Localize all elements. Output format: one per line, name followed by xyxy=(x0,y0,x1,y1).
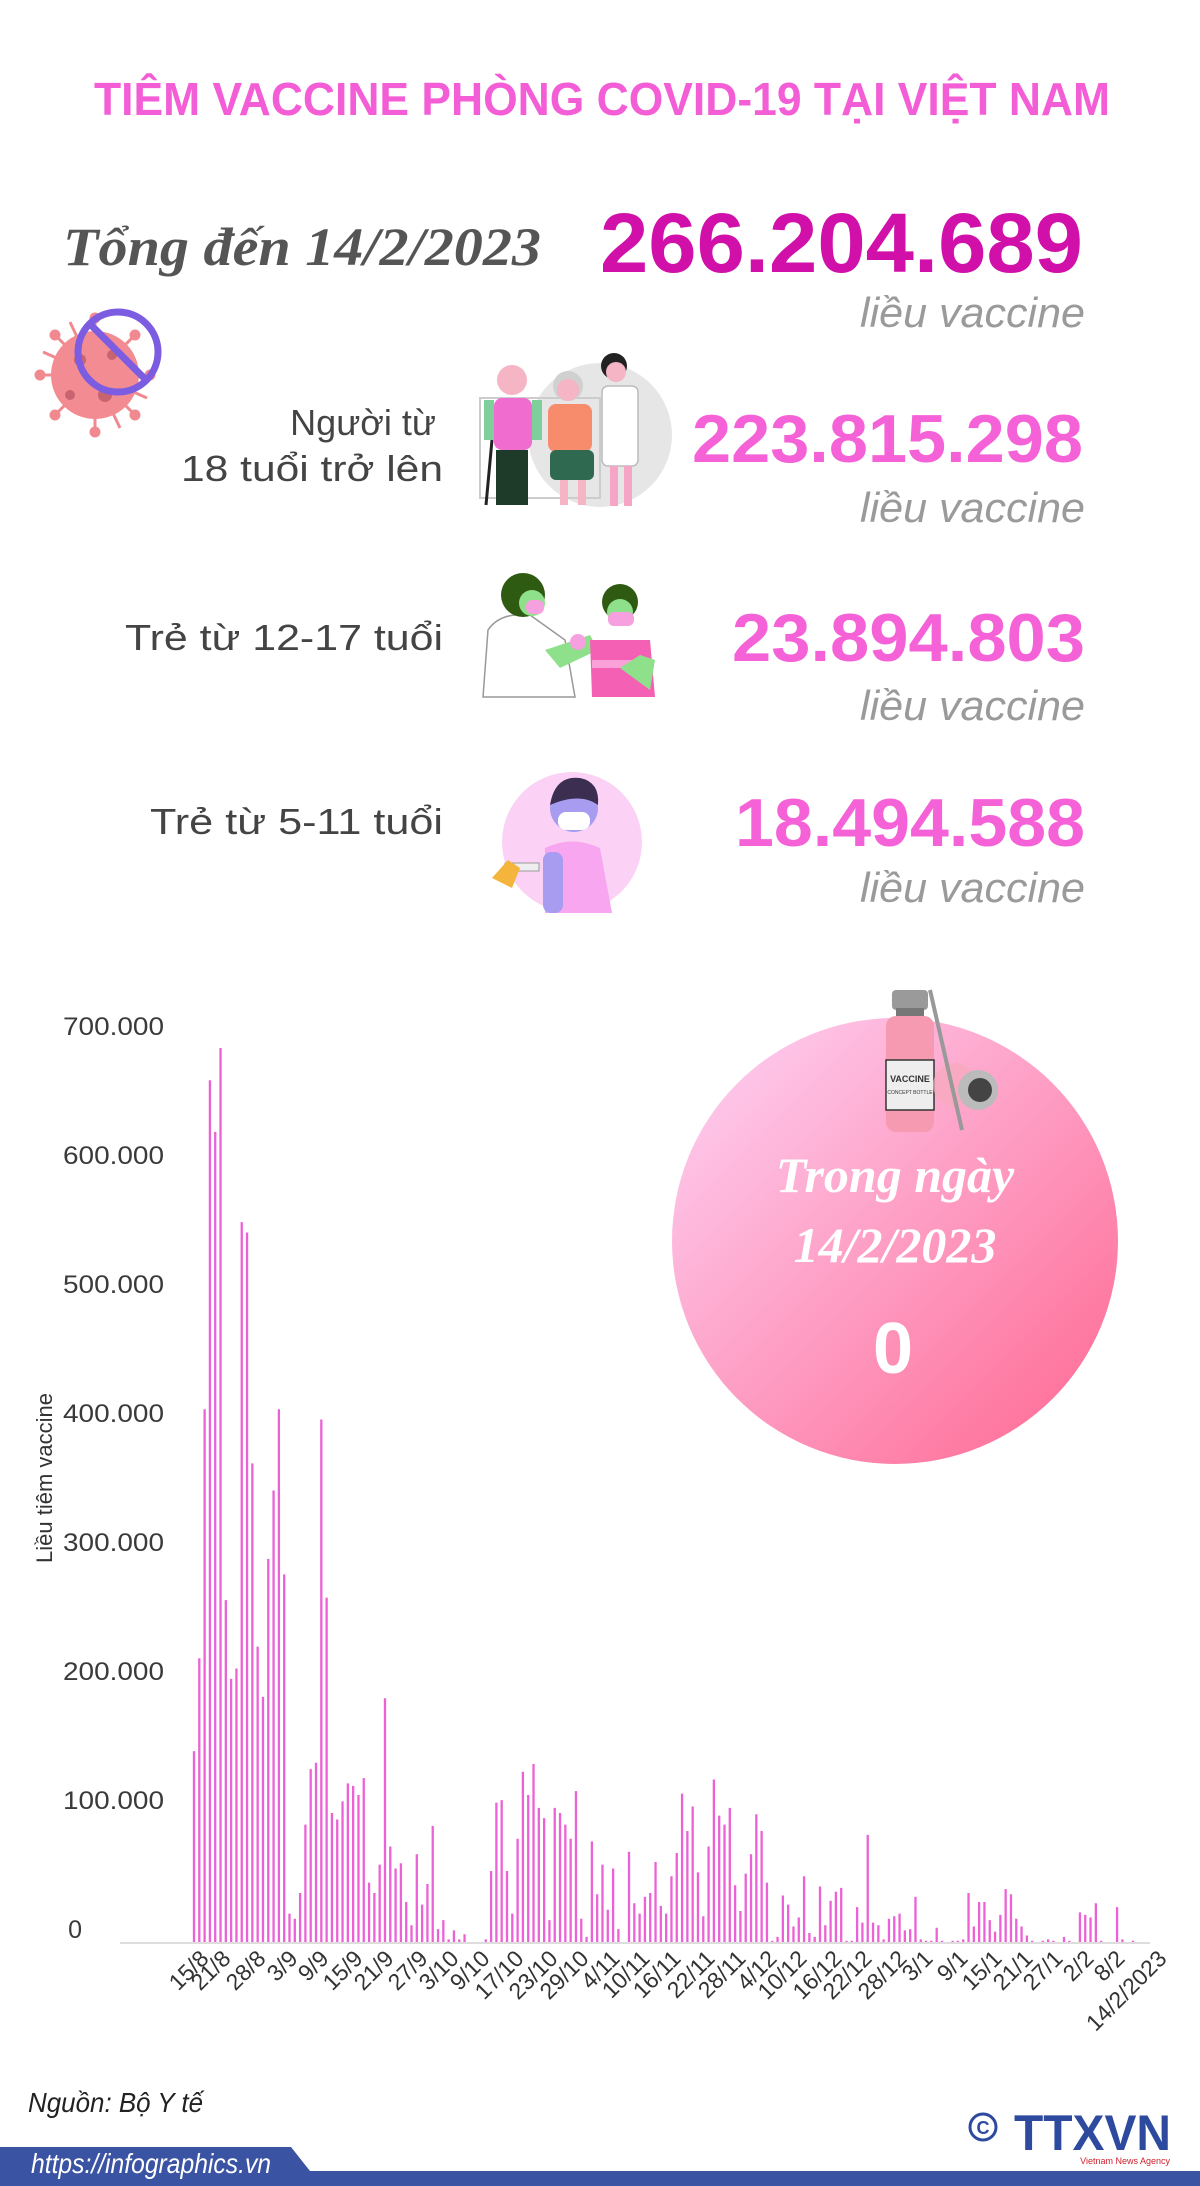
icon: virus prohibited xyxy=(36,312,158,436)
x axis labels: 22/11 xyxy=(662,1945,720,2003)
x axis labels: 3/9 xyxy=(262,1945,303,1986)
callout circle: today: Trong ngày xyxy=(776,1147,1015,1203)
illustration: elderly vaccination xyxy=(480,353,672,507)
y axis labels: 400.000 xyxy=(63,1400,164,1428)
total number xyxy=(600,196,1085,336)
x axis labels: 28/8 xyxy=(220,1945,271,1995)
number: adults: 223.815.298 xyxy=(692,401,1083,477)
x axis labels: 17/10 xyxy=(469,1945,529,2004)
y axis labels: 200.000 xyxy=(63,1658,164,1686)
x axis labels: 16/11 xyxy=(628,1945,686,2003)
footer bar xyxy=(0,2147,1200,2186)
x axis labels: 3/10 xyxy=(413,1945,464,1995)
label: 5-11: Trẻ từ 5-11 tuổi xyxy=(150,801,443,842)
x axis labels: 21/8 xyxy=(185,1945,236,1995)
logo: TTXVN: TTXVN xyxy=(1014,2105,1171,2161)
x axis labels: 27/9 xyxy=(382,1945,433,1995)
x axis labels: 23/10 xyxy=(503,1945,563,2004)
y axis labels: 700.000 xyxy=(63,1013,164,1041)
illustration: teen vaccination xyxy=(483,573,655,697)
y axis title: Liều tiêm vaccine xyxy=(32,1393,57,1563)
total label: Tổng đến 14/2/2023 xyxy=(63,217,541,277)
bar chart xyxy=(194,1048,1133,1942)
y axis labels: 300.000 xyxy=(63,1529,164,1557)
label: adults: Người từ xyxy=(290,402,436,443)
x axis labels: 4/11 xyxy=(576,1945,625,1994)
icon: vaccine bottle and syringe: CONCEPT BOTTLE xyxy=(887,1090,933,1096)
icon: vaccine bottle and syringe: VACCINE xyxy=(890,1074,930,1084)
x axis labels: 28/11 xyxy=(693,1945,751,2003)
x axis labels: 29/10 xyxy=(534,1945,594,2004)
callout circle: today xyxy=(672,1018,1118,1464)
callout circle: today: 0 xyxy=(873,1309,913,1389)
total number: 266.204.689 xyxy=(600,196,1083,290)
total number: liều vaccine xyxy=(860,289,1085,336)
axis line xyxy=(120,1942,1150,1944)
logo: TTXVN: Vietnam News Agency xyxy=(1080,2156,1170,2166)
callout circle: today: 14/2/2023 xyxy=(794,1217,996,1273)
label: adults xyxy=(181,402,443,489)
logo: TTXVN: C xyxy=(976,2118,990,2138)
x axis labels: 27/1 xyxy=(1017,1945,1068,1995)
source: Nguồn: Bộ Y tế xyxy=(28,2087,205,2118)
x axis labels: 10/12 xyxy=(752,1945,812,2004)
y axis labels xyxy=(63,1013,164,1944)
label: 12-17: Trẻ từ 12-17 tuổi xyxy=(125,617,443,658)
x axis labels: 21/1 xyxy=(987,1945,1038,1995)
x axis labels: 14/2/2023 xyxy=(1081,1945,1172,2036)
number: 5-11: liều vaccine xyxy=(860,864,1085,911)
number: 5-11: 18.494.588 xyxy=(735,785,1085,861)
x axis labels: 9/10 xyxy=(444,1945,495,1995)
x axis labels: 16/12 xyxy=(787,1945,847,2004)
x axis labels: 3/1 xyxy=(897,1945,938,1986)
x axis labels: 15/8 xyxy=(163,1945,214,1995)
number: adults: liều vaccine xyxy=(860,484,1085,531)
logo: TTXVN xyxy=(970,2105,1171,2166)
y axis labels: 0 xyxy=(68,1916,82,1944)
number: 12-17 xyxy=(732,600,1085,729)
icon: vaccine bottle and syringe xyxy=(886,990,998,1132)
label: adults: 18 tuổi trở lên xyxy=(181,448,443,489)
y axis labels: 100.000 xyxy=(63,1787,164,1815)
x axis labels: 15/9 xyxy=(317,1945,368,1995)
x axis labels: 2/2 xyxy=(1058,1945,1099,1986)
y axis labels: 500.000 xyxy=(63,1271,164,1299)
y axis labels: 600.000 xyxy=(63,1142,164,1170)
illustration: child vaccination xyxy=(492,772,642,913)
x axis labels: 10/11 xyxy=(597,1945,655,2003)
footer bar: https://infographics.vn xyxy=(31,2148,271,2179)
x axis labels: 15/1 xyxy=(956,1945,1007,1995)
x axis labels: 21/9 xyxy=(348,1945,399,1995)
x axis labels: 4/12 xyxy=(731,1945,782,1995)
number: 5-11 xyxy=(735,785,1085,911)
x axis labels: 9/1 xyxy=(932,1945,973,1986)
x axis labels: 22/12 xyxy=(817,1945,877,2004)
x axis labels: 28/12 xyxy=(852,1945,912,2004)
x axis labels: 9/9 xyxy=(293,1945,334,1986)
number: 12-17: liều vaccine xyxy=(860,682,1085,729)
number: adults xyxy=(692,401,1085,531)
title: TIÊM VACCINE PHÒNG COVID-19 TẠI VIỆT NAM xyxy=(94,73,1110,125)
x axis labels xyxy=(163,1945,1172,2036)
x axis labels: 8/2 xyxy=(1089,1945,1130,1986)
number: 12-17: 23.894.803 xyxy=(732,600,1085,676)
